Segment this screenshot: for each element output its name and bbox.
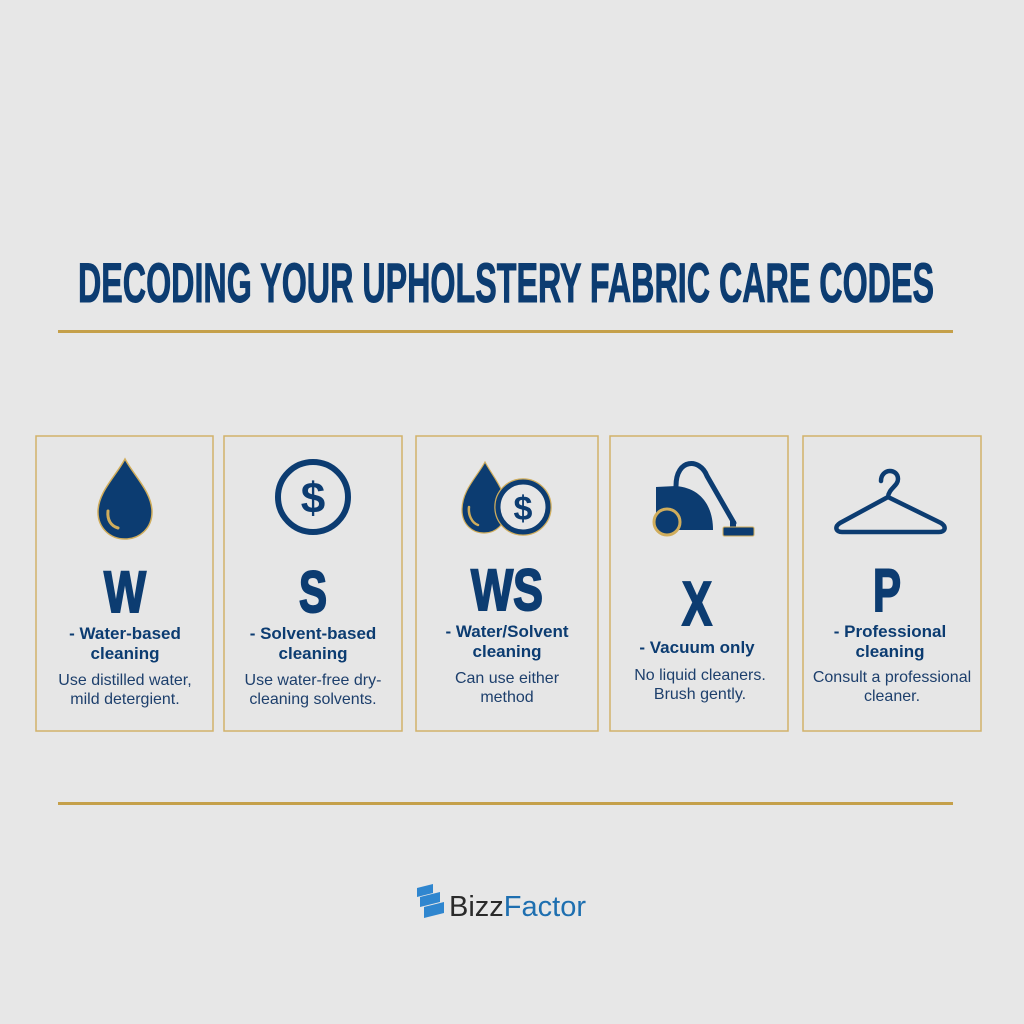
panel: S: $ [301, 474, 325, 523]
panel: S: Use water-free dry- [245, 672, 381, 689]
panel: W [36, 436, 213, 731]
logo [417, 884, 586, 923]
panel: S: - Solvent-based [250, 624, 376, 643]
panel: WS: - Water/Solvent [445, 622, 569, 641]
code W: W [104, 560, 146, 625]
icon: water drop [98, 459, 152, 539]
icon: drop and coin [462, 462, 506, 533]
code X: X [682, 570, 712, 639]
panel: X: Brush gently. [654, 686, 746, 703]
panel: WS: method [480, 689, 534, 706]
logo: BizzFactor [449, 891, 586, 923]
panel: P: - Professional [834, 622, 946, 641]
panel: W: Use distilled water, [58, 672, 192, 689]
panel: X: - Vacuum only [639, 638, 755, 657]
icon: dollar coin [278, 462, 348, 532]
panel: P: cleaning [856, 642, 924, 661]
panel: S [224, 436, 402, 731]
icon: logo mark [417, 884, 444, 918]
panel: W: cleaning [91, 644, 159, 663]
code P: P [873, 557, 901, 624]
code S: S [299, 560, 327, 625]
panel: WS: cleaning [473, 642, 541, 661]
code WS: WS [471, 558, 543, 623]
panel: X [610, 436, 788, 731]
panel: P [803, 436, 981, 731]
panel: X: No liquid cleaners. [634, 667, 766, 684]
panel: W: mild detergient. [70, 691, 180, 708]
panel: W: - Water-based [69, 624, 181, 643]
icon: vacuum [676, 464, 734, 523]
panel: WS: Can use either [455, 670, 560, 687]
panel: P: cleaner. [864, 688, 920, 705]
panel: WS: $ [514, 490, 533, 528]
panel: S: cleaning [279, 644, 347, 663]
panel: P: Consult a professional [813, 669, 971, 686]
panel: S: cleaning solvents. [249, 691, 377, 708]
icon: hanger [836, 471, 945, 532]
panel: WS [416, 436, 598, 731]
